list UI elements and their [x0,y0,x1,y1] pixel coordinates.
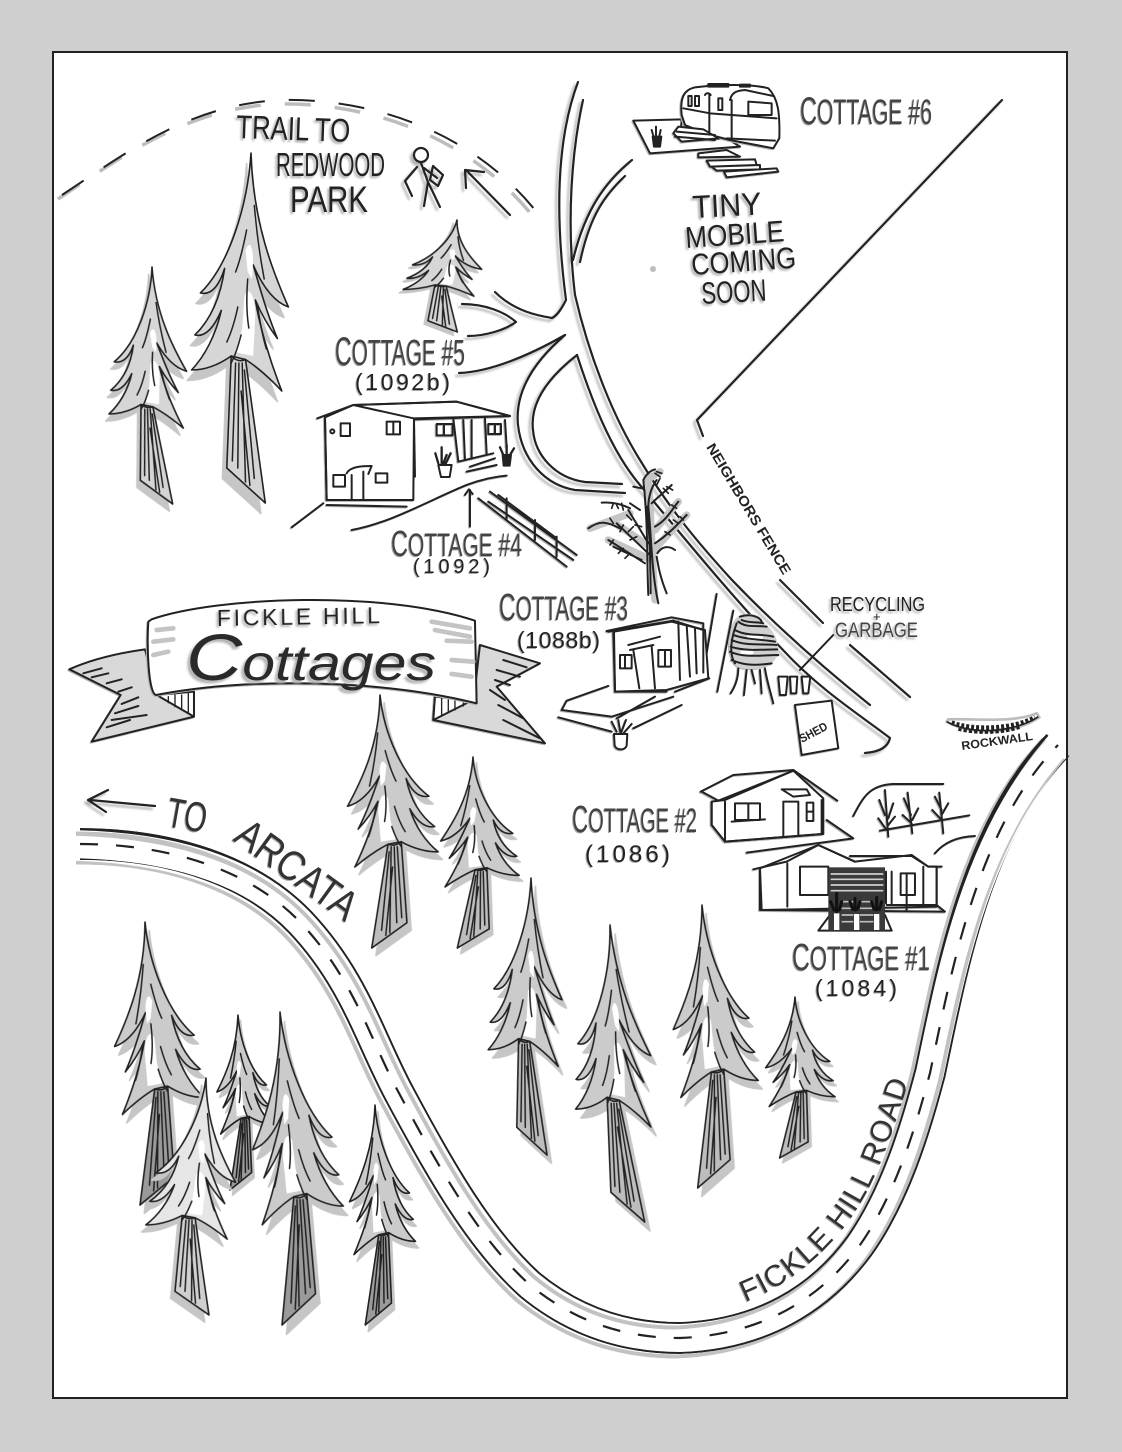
tree: lower left front [142,1078,240,1315]
arrow: to Arcata [88,790,155,812]
bare tree [588,469,687,603]
tree: lower left two [217,1015,271,1190]
icon: planter left [435,447,452,477]
trail label: PARK [290,179,368,220]
label: cottage 3: (1088b) [517,627,600,653]
trail label [236,108,385,220]
label: tiny mobile coming soon: MOBILE [684,215,785,255]
icon: planter [652,127,661,147]
cottage 3 scene [558,594,838,755]
cottage 3 house [558,594,733,732]
rockwall: ROCKWALL [960,729,1034,753]
label: cottage 5 [335,330,465,395]
cottage 1 house [753,845,945,912]
neighbors fence line [697,100,1002,697]
banner: folds [157,692,472,720]
tree: group six [763,997,838,1158]
tree: left tall [192,153,288,503]
icon: planter right [500,445,514,466]
driveways and roads [459,82,890,753]
label: recycling and garbage: + [873,609,881,624]
label: cottage 1 [792,937,930,1001]
label: tiny mobile coming soon: SOON [701,273,767,311]
neighbors fence label: NEIGHBORS FENCE [703,440,794,577]
icon: hiker [405,148,443,207]
road label: to Arcata: ARCATA [227,809,368,930]
icon: planter [612,720,632,749]
tree: group three [485,878,565,1155]
banner: right tail [433,645,545,743]
banner: shading [153,622,473,677]
label: tiny mobile coming soon: COMING [690,242,797,282]
label: cottage 1: COTTAGE #1 [792,937,930,979]
cottage 5 and 4 house [292,402,577,567]
trail label: TRAIL TO [236,108,351,149]
grey dot [650,266,656,272]
label: cottage 6: COTTAGE #6 [800,90,932,133]
label: cottage 5: COTTAGE #5 [335,330,465,374]
shed [795,701,838,755]
trail to Redwood Park [58,100,535,214]
tree: group four [561,925,664,1222]
label: cottage 4: COTTAGE #4 [391,523,522,564]
label: cottage 2 [572,799,697,868]
tree: centre one [345,695,440,948]
label: recycling and garbage: GARBAGE [835,619,918,642]
label: cottage 4: (1092) [413,556,490,578]
tree: lower left four [350,1105,416,1325]
label: recycling and garbage: RECYCLING [830,594,925,616]
label: cottage 1: (1084) [815,975,897,1001]
icon: bins [778,677,810,695]
label: cottage 3: COTTAGE #3 [499,587,628,629]
tree: lower left three [246,1012,349,1325]
arrow: to trail [465,170,510,215]
tree: lower left one [111,922,207,1205]
tiny mobile trailer [633,84,779,177]
road label: to Arcata [163,789,368,930]
label: shed: SHED [797,719,830,746]
banner [69,600,545,743]
tree: centre two [438,757,522,948]
banner title: Cottages [186,620,436,694]
road label: Fickle Hill Road: FICKLE HILL ROAD [738,1079,906,1302]
label: cottage 4 [391,523,522,578]
label: cottage 2: COTTAGE #2 [572,799,697,841]
road label: to Arcata: TO [163,789,211,842]
banner: ribbon [148,600,477,703]
bushy tree [729,614,778,703]
redwood trees lower [111,695,838,1325]
cottage 2 house [701,770,853,853]
label: cottage 5: (1092b) [355,369,450,395]
trailer body [681,84,779,148]
trailer pad [633,119,740,153]
callout line [800,635,833,670]
cottage 2 and cottage 1 [701,770,975,912]
label: tiny mobile coming soon: TINY [691,185,762,225]
trailer steps [673,127,778,177]
rockwall [947,713,1039,753]
banner title: FICKLE HILL [217,602,380,631]
label: cottage 3 [499,587,628,653]
label: recycling and garbage [830,594,925,642]
redwood trees upper [103,153,487,504]
label: cottage 2: (1086) [585,841,670,868]
label: tiny mobile coming soon [684,185,797,311]
tree: left small [103,267,192,504]
tree: group five [670,905,761,1188]
cottage 1 deck and plants [818,867,892,931]
trail label: REDWOOD [276,146,385,183]
tree: by trail [399,220,487,332]
banner: left tail [69,649,194,742]
garden plants [853,784,975,853]
Fickle Hill road [76,745,1058,1342]
